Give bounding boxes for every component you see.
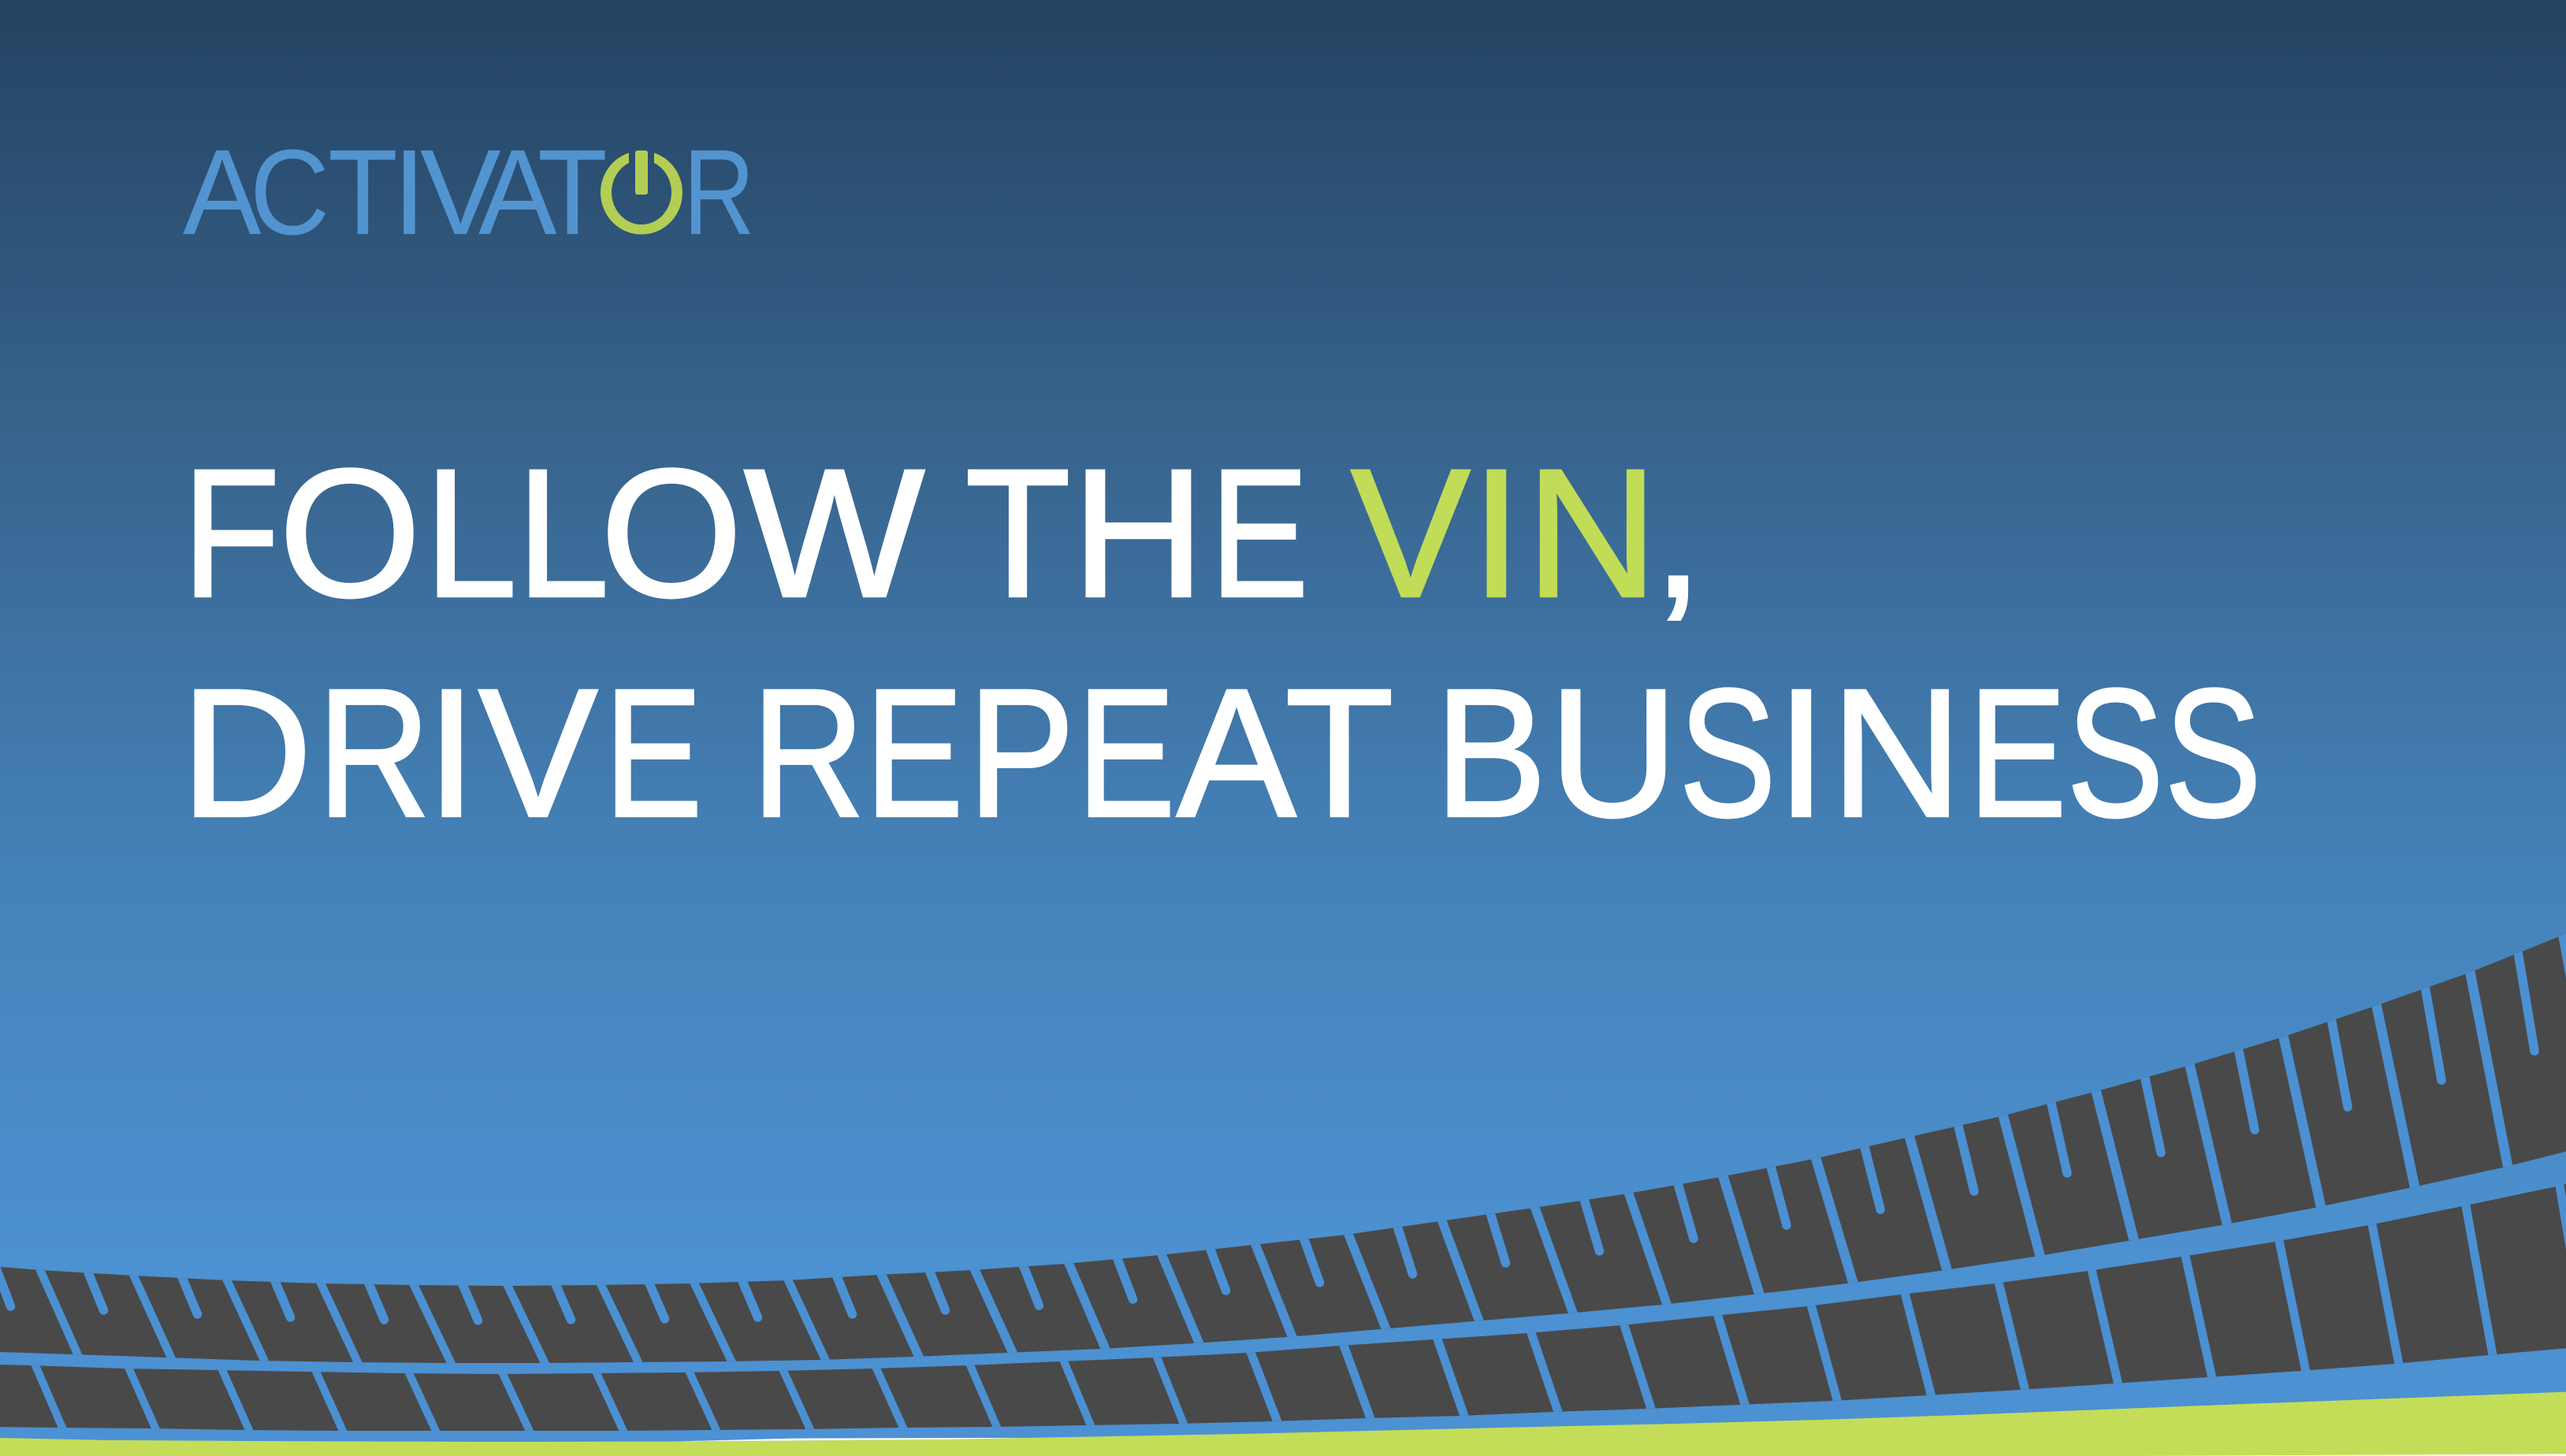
logo wordmark: R — [683, 124, 755, 260]
title — [180, 432, 2262, 856]
title line 2: E — [604, 652, 702, 856]
title line 2: T — [1285, 652, 1391, 856]
title line 2: B — [1434, 652, 1547, 856]
title line 2: I — [426, 652, 477, 856]
title line 1: V — [1351, 432, 1471, 636]
logo wordmark: A — [183, 124, 262, 260]
title line 1: O — [601, 432, 742, 636]
title line 1: O — [279, 432, 421, 636]
title line 2: U — [1549, 652, 1678, 856]
title line 1: W — [744, 432, 924, 636]
title line 2: S — [2067, 652, 2164, 856]
title line 2: S — [2165, 652, 2262, 856]
title line 2: R — [318, 652, 430, 856]
green road strip — [0, 1392, 2566, 1456]
title line 2: A — [1177, 652, 1296, 856]
white corner sliver — [2128, 1454, 2566, 1456]
title line 2: E — [1969, 652, 2066, 856]
title line 1: I — [1471, 432, 1522, 636]
logo wordmark: A — [478, 124, 557, 260]
title line 1: E — [1210, 432, 1308, 636]
title line 2: V — [478, 652, 598, 856]
title line 1: , — [1653, 432, 1703, 636]
icon: power button replacing the letter O — [601, 150, 682, 235]
title line 1: H — [1072, 432, 1205, 636]
title line 2: D — [180, 652, 312, 856]
logo wordmark: T — [328, 124, 398, 260]
title line 1: N — [1526, 432, 1658, 636]
title line 2: I — [1776, 652, 1827, 856]
title line 2: N — [1831, 652, 1962, 856]
title line 1: F — [182, 432, 281, 636]
upper tread band — [0, 929, 2566, 1369]
title line 2: E — [865, 652, 963, 856]
logo wordmark: I — [392, 124, 426, 260]
tire tread — [0, 929, 2566, 1436]
title line 1: T — [965, 432, 1071, 636]
title line 2: R — [752, 652, 865, 856]
logo: Activator — [183, 150, 750, 235]
logo wordmark: T — [537, 124, 608, 260]
white highlight sliver — [678, 1438, 1025, 1442]
title line 2: S — [1679, 652, 1776, 856]
logo wordmark: V — [420, 124, 501, 260]
title line 2: E — [1077, 652, 1175, 856]
title line 2: P — [968, 652, 1075, 856]
title line 1: L — [425, 432, 517, 636]
lower tread band — [0, 1181, 2566, 1436]
title line 1: L — [517, 432, 609, 636]
logo wordmark: C — [250, 124, 329, 260]
